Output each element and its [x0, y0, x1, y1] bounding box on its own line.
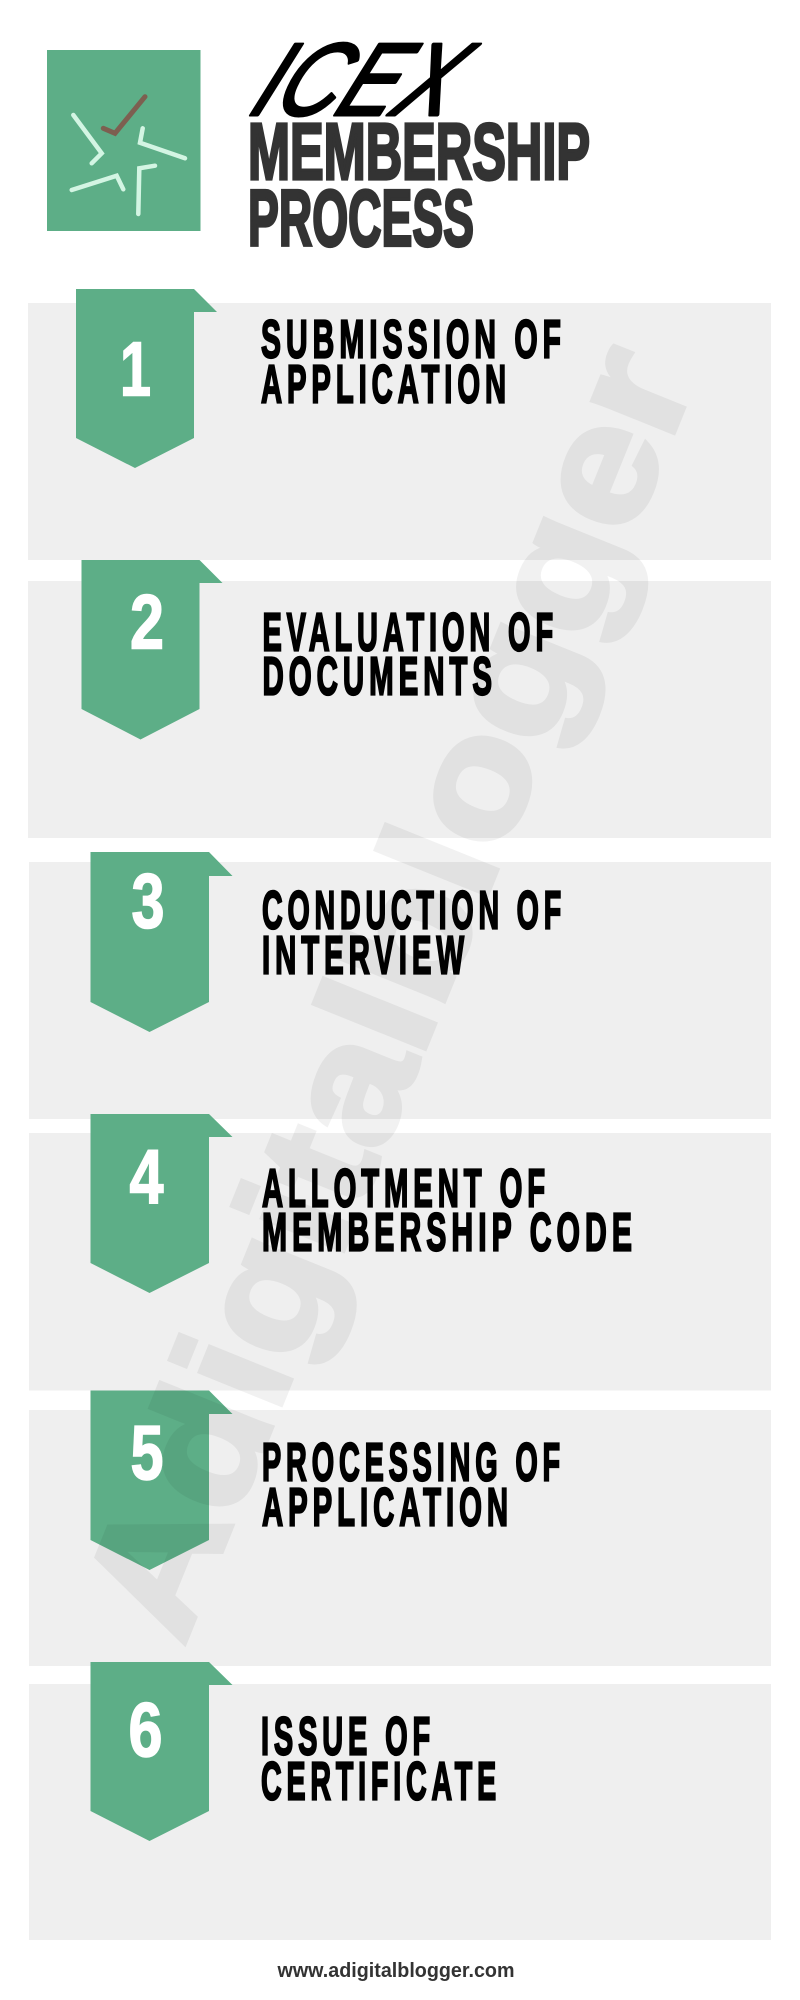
heading 3: [262, 882, 566, 986]
number 6: 6: [128, 1688, 162, 1774]
heading 4: [262, 1160, 637, 1262]
number 1: 1: [120, 326, 151, 412]
number 5: 5: [130, 1410, 164, 1496]
heading 4: ALLOTMENT OF: [262, 1160, 550, 1218]
number 3: 3: [132, 858, 164, 944]
panel: step 3: [29, 852, 771, 1119]
heading 1: [261, 310, 566, 414]
heading 2: [262, 604, 558, 706]
ribbon 4: [90, 1114, 232, 1293]
ribbon 2: [82, 560, 222, 740]
title: [237, 22, 590, 262]
panel: step 4: [29, 1114, 771, 1390]
heading 6: CERTIFICATE: [261, 1752, 501, 1812]
panel: step 1: [28, 289, 771, 560]
heading 6: ISSUE OF: [261, 1708, 435, 1766]
panel background 6: [29, 1684, 771, 1940]
panel background 4: [29, 1133, 771, 1390]
panel: step 2: [28, 560, 771, 838]
panel background 5: [29, 1410, 771, 1666]
watermark: Adigitalblogger: [45, 321, 729, 1660]
title: membership: MEMBERSHIP: [248, 107, 590, 196]
heading 5: [262, 1434, 565, 1538]
panel background 2: [28, 581, 771, 838]
ribbon 3: [90, 852, 232, 1032]
footer url: www.adigitalblogger.com: [277, 1960, 514, 1982]
ribbon 6: [90, 1662, 232, 1841]
number 2: 2: [130, 580, 164, 666]
title: ICEX: ICEX: [237, 22, 491, 137]
panel: step 5: [29, 1390, 771, 1666]
heading 3: INTERVIEW: [262, 926, 469, 986]
ribbon 1: [76, 289, 217, 468]
heading 6: [261, 1708, 501, 1812]
heading 2: EVALUATION OF: [262, 604, 558, 662]
title: process: PROCESS: [248, 174, 474, 262]
heading 5: APPLICATION: [262, 1478, 513, 1538]
ribbon 5: [90, 1390, 232, 1570]
logo: [47, 50, 200, 231]
heading 2: DOCUMENTS: [262, 648, 497, 706]
heading 1: APPLICATION: [261, 356, 511, 414]
heading 1: SUBMISSION OF: [261, 310, 566, 370]
panel background 1: [28, 303, 771, 560]
panel background 3: [29, 862, 771, 1119]
number 4: 4: [130, 1134, 164, 1220]
panel: step 6: [29, 1662, 771, 1940]
